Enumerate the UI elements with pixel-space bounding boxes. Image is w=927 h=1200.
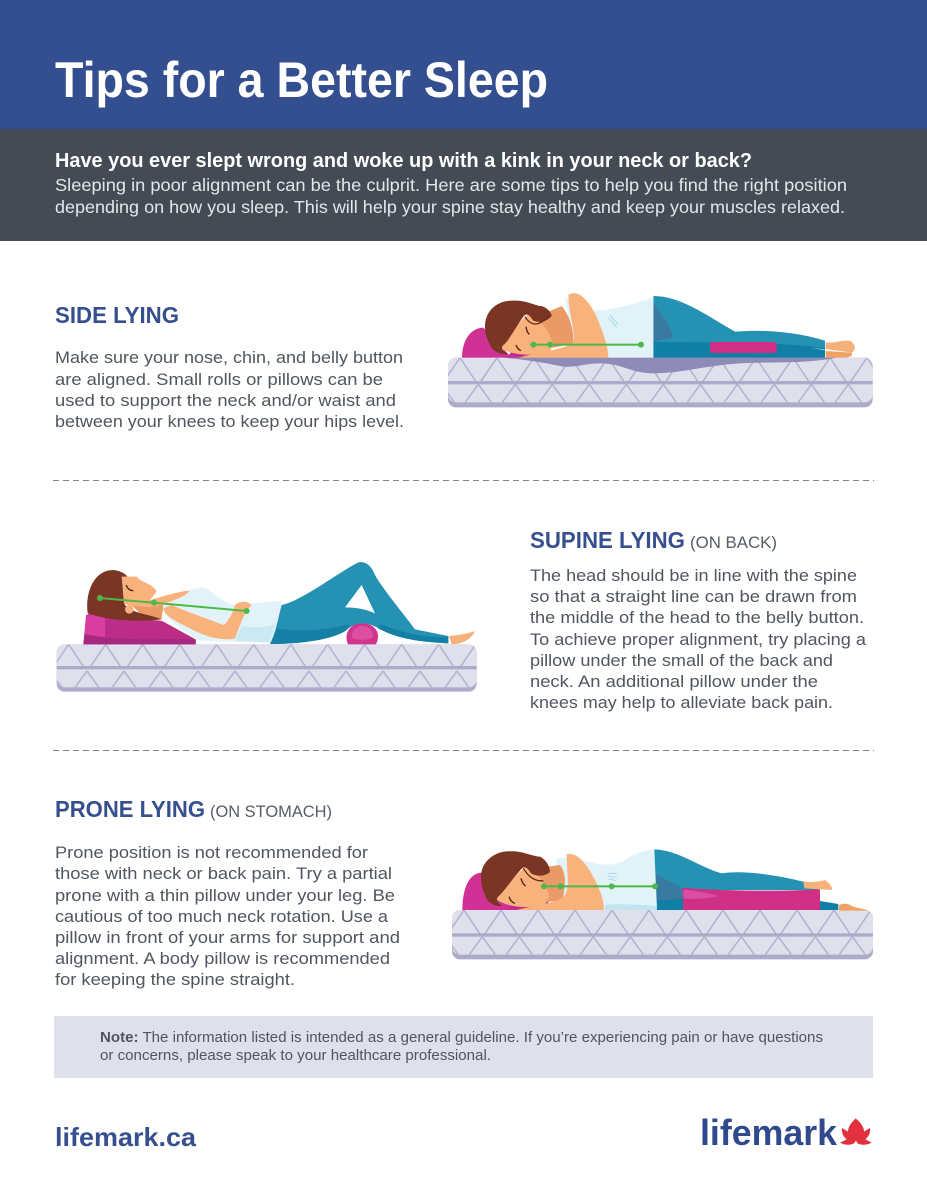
intro question: Have you ever slept wrong and woke up with a kink in your neck or back? (55, 150, 752, 172)
text: side lying tips (55, 348, 404, 431)
alignment line (530, 342, 644, 348)
text: prone lying tips: Prone position is not recommended for (55, 843, 368, 862)
top (552, 849, 657, 910)
arm (163, 602, 252, 639)
subheading: on stomach: (ON STOMACH) (210, 803, 332, 821)
foot (449, 631, 475, 644)
hair (87, 570, 162, 621)
intro text: depending on how you sleep. This will help your spine stay healthy and keep your muscles relaxed. (55, 197, 845, 217)
text: side lying tips: used to support the neck and/or waist and (55, 391, 396, 410)
text: supine lying tips: the middle of the head to the belly button. (530, 608, 864, 627)
header banner (0, 0, 927, 129)
text: supine lying tips (530, 566, 867, 712)
knee cushion (347, 623, 378, 644)
face and collar (122, 577, 189, 607)
text: supine lying tips: neck. An additional pillow under the (530, 672, 818, 691)
illustration: woman sleeping on her side (448, 293, 873, 407)
text: side lying tips: between your knees to keep your hips level. (55, 412, 404, 431)
knee pillow (710, 342, 777, 353)
pillow (462, 873, 515, 910)
text: prone lying tips: prone with a thin pillow under your leg. Be (55, 886, 395, 905)
panel: side lying (55, 293, 873, 431)
text: supine lying tips: pillow under the small of the back and (530, 651, 833, 670)
face (494, 867, 549, 907)
alignment line (97, 595, 250, 614)
face (500, 315, 553, 355)
illustration: woman lying on her back (57, 562, 477, 692)
trousers (654, 849, 820, 910)
logo: lifemark: lifemark (700, 1112, 838, 1153)
text: supine lying tips: The head should be in line with the spine (530, 566, 857, 585)
panel: supine lying (57, 527, 867, 712)
ear (125, 605, 134, 614)
hair (485, 301, 552, 354)
pillow (462, 328, 512, 358)
note text (100, 1030, 823, 1064)
mattress (57, 644, 477, 692)
text: side lying tips: are aligned. Small rolls or pillows can be (55, 370, 383, 389)
note text: or concerns, please speak to your healthcare professional. (100, 1048, 491, 1064)
heading: side lying: SIDE LYING (55, 302, 179, 328)
note text: Note: The information listed is intended as a general guideline. If you’re experiencing pain or have questions (100, 1030, 823, 1046)
arm (517, 854, 604, 910)
panel: prone lying (55, 796, 873, 989)
intro band (0, 129, 927, 241)
heading: supine lying: SUPINE LYING (530, 527, 685, 553)
top (162, 587, 282, 643)
text: prone lying tips: alignment. A body pillow is recommended (55, 949, 390, 968)
neck (130, 600, 163, 619)
text: side lying tips: Make sure your nose, chin, and belly button (55, 348, 403, 367)
neck (537, 306, 573, 350)
subheading: on back: (ON BACK) (690, 534, 777, 552)
mattress (452, 910, 873, 959)
heading: prone lying: PRONE LYING (55, 796, 205, 822)
intro text (55, 175, 847, 217)
head pillow (83, 613, 196, 644)
text: prone lying tips: for keeping the spine straight. (55, 970, 295, 989)
mattress (448, 358, 873, 407)
illustration: woman in partial prone position (452, 849, 873, 959)
icon: maple leaf (840, 1118, 872, 1145)
arm (518, 293, 608, 358)
website url: lifemark.ca (55, 1122, 197, 1152)
text: prone lying tips: those with neck or back pain. Try a partial (55, 864, 392, 883)
neck (535, 865, 565, 903)
hair (481, 851, 550, 906)
intro text: Sleeping in poor alignment can be the culprit. Here are some tips to help you find the right position (55, 175, 847, 195)
feet (826, 341, 855, 353)
top foot (803, 880, 832, 890)
text: supine lying tips: so that a straight line can be drawn from (530, 587, 857, 606)
trousers (653, 296, 825, 358)
text: prone lying tips (55, 843, 400, 989)
text: supine lying tips: knees may help to alleviate back pain. (530, 693, 833, 712)
torso top (565, 297, 653, 358)
trousers (270, 562, 448, 644)
text: prone lying tips: cautious of too much neck rotation. Use a (55, 907, 389, 926)
lower leg and foot (820, 901, 838, 910)
body pillow (682, 888, 820, 910)
alignment line (541, 883, 658, 889)
note box (54, 1016, 873, 1078)
title: Tips for a Better Sleep (55, 52, 548, 108)
text: prone lying tips: pillow in front of your arms for support and (55, 928, 400, 947)
text: supine lying tips: To achieve proper alignment, try placing a (530, 630, 867, 649)
